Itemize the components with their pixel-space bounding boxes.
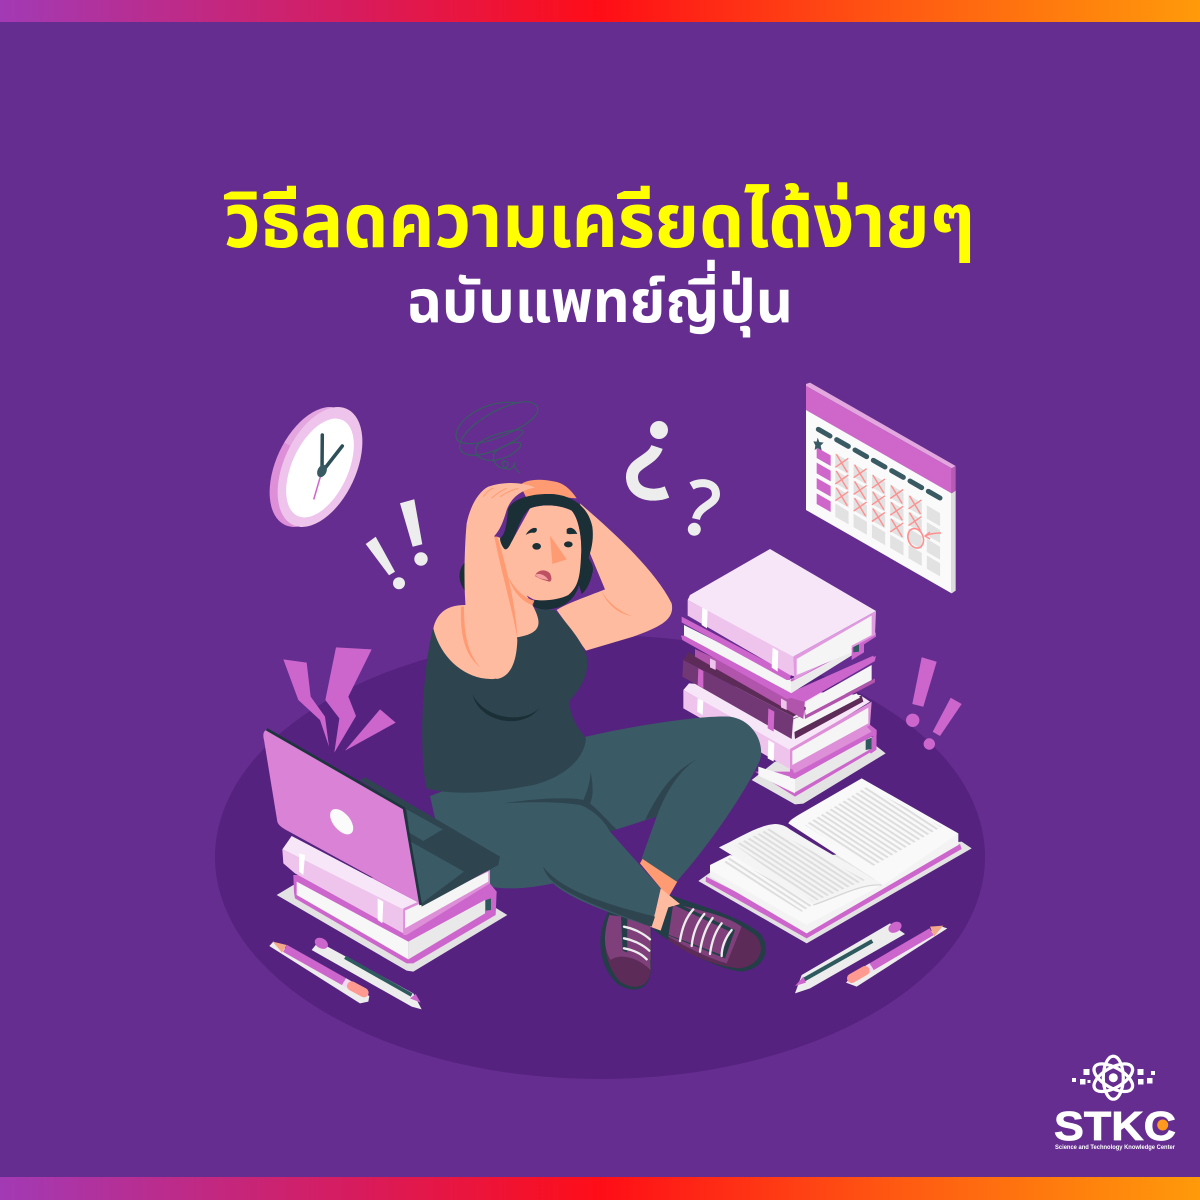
icon: dizzy scribble xyxy=(456,402,538,473)
raised forearm xyxy=(461,483,535,679)
pants xyxy=(430,716,761,927)
tank top xyxy=(422,608,587,793)
purple book xyxy=(695,649,875,719)
atom icon xyxy=(1090,1056,1137,1099)
dark book xyxy=(682,652,863,739)
left pen xyxy=(312,936,422,1009)
bottom book xyxy=(755,723,877,797)
shoe: left xyxy=(600,912,652,990)
books under laptop xyxy=(277,836,507,972)
front hair xyxy=(500,494,593,558)
laptop xyxy=(263,729,500,907)
woman xyxy=(422,480,766,990)
subtitle: ฉบับแพทย์ญี่ปุ่น xyxy=(406,259,793,338)
top book xyxy=(681,549,876,699)
open book text lines xyxy=(719,787,942,912)
book stack right xyxy=(681,549,886,804)
pencil and pen right xyxy=(795,919,947,993)
shoe: right xyxy=(653,895,766,972)
shoulder skin xyxy=(433,567,539,679)
icon: question marks xyxy=(632,421,716,536)
top gradient bar xyxy=(0,0,1200,22)
facial features xyxy=(526,528,577,582)
logo: STKC xyxy=(1054,1056,1176,1151)
wordmark: STKC xyxy=(1054,1103,1176,1149)
open book xyxy=(698,778,972,943)
icon: exclamation marks right xyxy=(906,657,962,750)
fingers behind hair xyxy=(520,480,577,498)
logo dot xyxy=(1157,1120,1168,1130)
data squares xyxy=(1072,1069,1155,1084)
icon: wall clock xyxy=(252,394,380,540)
finger lines xyxy=(483,488,518,498)
icon: calendar xyxy=(806,383,956,593)
floor ellipse xyxy=(215,635,985,1079)
light book xyxy=(683,683,872,769)
icon: exclamation marks left xyxy=(366,499,428,589)
head xyxy=(497,480,593,609)
icon: lightning bolts xyxy=(283,647,396,753)
left pencil xyxy=(269,942,369,1003)
back hair right xyxy=(533,553,593,609)
calendar day cells xyxy=(835,453,941,576)
ankles xyxy=(640,856,680,931)
torso xyxy=(422,503,672,793)
title: วิธีลดความเครียดได้ง่ายๆ xyxy=(224,179,975,264)
arm shading xyxy=(461,537,534,667)
face xyxy=(497,505,581,600)
logo tagline: Science and Technology Knowledge Center xyxy=(1055,1144,1175,1151)
bottom gradient bar xyxy=(0,1177,1200,1200)
back hair left xyxy=(460,562,466,592)
right arm xyxy=(557,503,672,651)
